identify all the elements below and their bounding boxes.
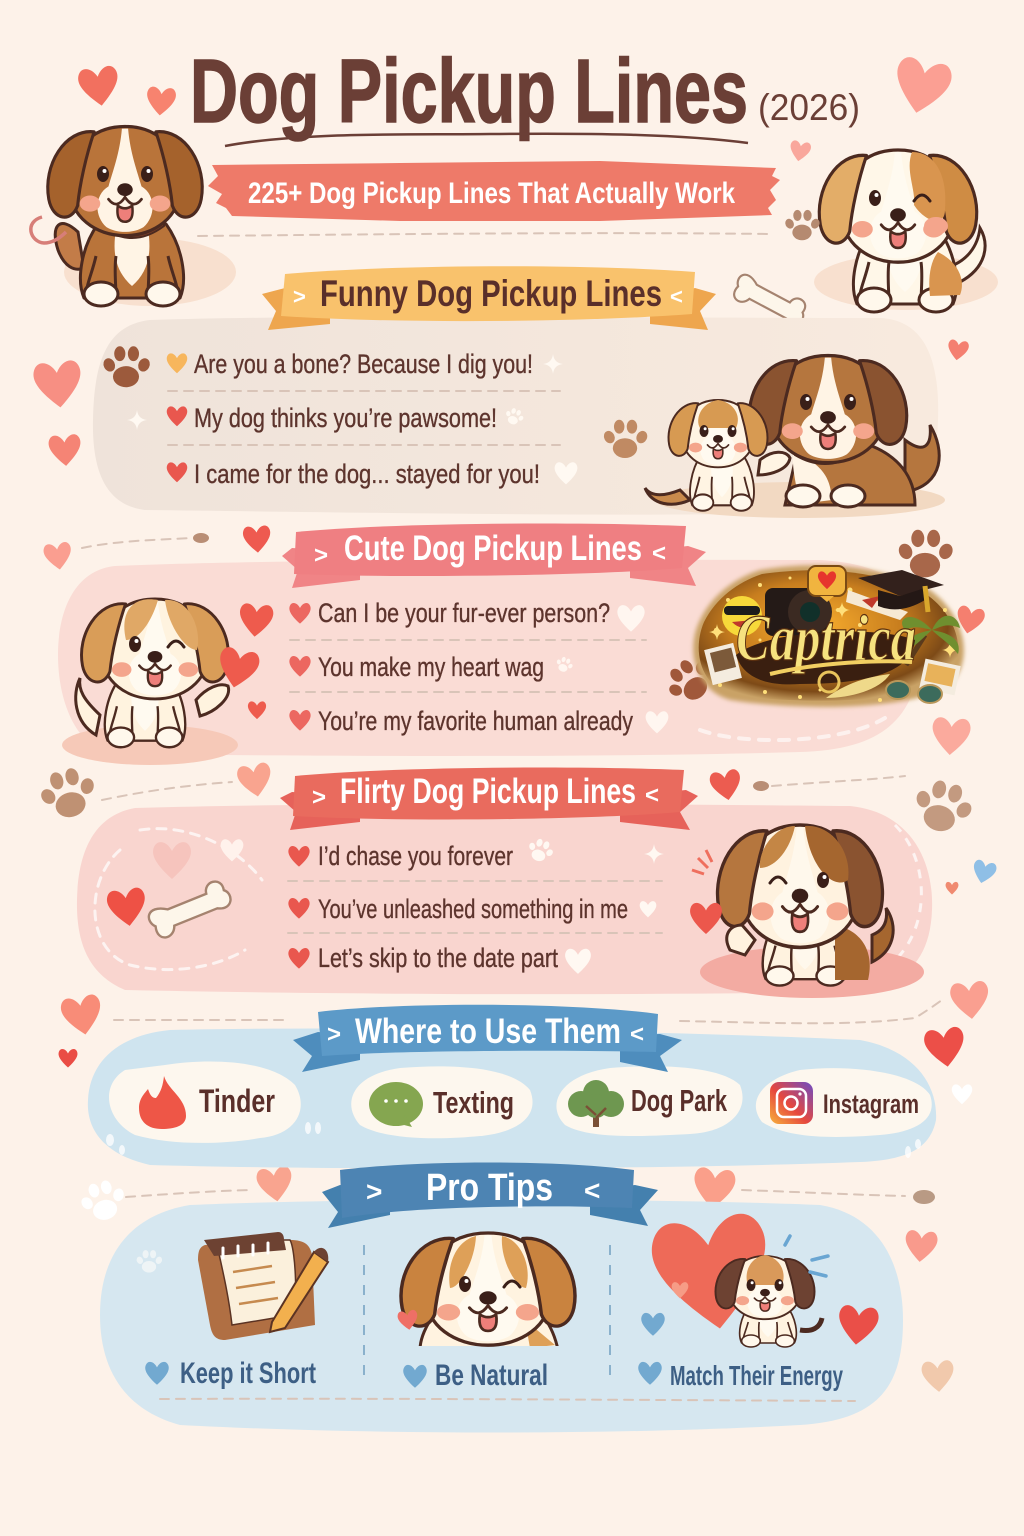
pro tips banner: < — [584, 1175, 600, 1206]
pill: instagram: Instagram — [823, 1089, 919, 1119]
subtitle banner — [208, 161, 780, 221]
panel: cute — [58, 560, 920, 756]
heart with puppy — [641, 1211, 880, 1347]
pill: dog park — [556, 1066, 743, 1136]
where banner: > — [327, 1021, 341, 1048]
tips labels: Match Their Energy — [670, 1360, 843, 1391]
puppy: cream top-right — [814, 150, 998, 312]
flirty banner — [280, 768, 698, 830]
swoosh and feather — [770, 661, 912, 698]
glitter — [705, 576, 958, 702]
decorative hearts top — [77, 55, 954, 163]
tips labels: Be Natural — [435, 1359, 548, 1392]
graduation cap — [858, 570, 944, 612]
big brown puppy — [749, 356, 939, 507]
title: Dog Pickup Lines — [190, 42, 748, 142]
panel: flirty — [77, 804, 932, 994]
heart and bone — [106, 878, 235, 941]
notepad icon — [198, 1232, 328, 1340]
pill: tinder — [109, 1062, 301, 1143]
palm — [902, 616, 960, 665]
where banner: Where to Use Them — [355, 1012, 621, 1051]
wordmark: Captrica — [736, 602, 916, 675]
cute lines — [289, 598, 646, 736]
puppy: pro tips natural — [397, 1233, 575, 1350]
icon: tree — [568, 1080, 624, 1127]
decor between panels — [34, 717, 998, 894]
heart behind logo — [954, 605, 986, 636]
cute banner: < — [652, 540, 666, 567]
funny lines: My dog thinks you’re pawsome! — [194, 403, 497, 433]
tips labels — [145, 1357, 843, 1392]
pill: texting: Texting — [433, 1085, 514, 1120]
pill: dog park: Dog Park — [631, 1083, 728, 1118]
flirty lines: Let’s skip to the date part — [318, 943, 558, 973]
tips labels: Keep it Short — [180, 1357, 316, 1390]
panel: funny — [93, 317, 938, 515]
flirty lines — [288, 841, 662, 973]
heart bubble — [808, 566, 846, 602]
icon: flame — [139, 1076, 186, 1129]
funny lines: Are you a bone? Because I dig you! — [194, 349, 533, 379]
funny banner — [262, 266, 716, 330]
panel paw — [101, 346, 152, 387]
pill: instagram — [756, 1068, 932, 1137]
panel: where to use — [88, 1028, 936, 1168]
panel: pro tips — [100, 1200, 903, 1433]
cute banner: Cute Dog Pickup Lines — [344, 529, 642, 568]
paw behind logo — [658, 650, 721, 712]
puppy: brown top-left — [31, 126, 236, 306]
pro tips banner: > — [366, 1176, 382, 1207]
cute lines: You make my heart wag — [318, 652, 544, 682]
flirty banner: Flirty Dog Pickup Lines — [340, 772, 636, 811]
puppy: cute with heart — [62, 599, 274, 765]
funny banner: Funny Dog Pickup Lines — [320, 273, 662, 314]
pill: texting — [351, 1066, 533, 1138]
star and leaf decor — [135, 1250, 163, 1273]
flirty lines: I’d chase you forever — [318, 841, 513, 871]
puppy: flirty — [690, 825, 924, 998]
funny lines: I came for the dog... stayed for you! — [194, 459, 540, 489]
decor lower — [59, 980, 991, 1393]
pill: tinder: Tinder — [199, 1083, 275, 1119]
where banner: < — [630, 1021, 644, 1048]
camera — [765, 588, 832, 636]
where banner — [293, 1005, 682, 1072]
cute lines: Can I be your fur-ever person? — [318, 598, 610, 628]
subtitle banner: 225+ Dog Pickup Lines That Actually Work — [248, 177, 735, 210]
pro tips banner — [322, 1162, 658, 1228]
cute banner: > — [314, 542, 328, 569]
icon: chat bubble — [369, 1082, 423, 1127]
flirty banner: < — [645, 782, 659, 809]
icon: instagram — [770, 1082, 813, 1124]
Captrica logo — [693, 565, 964, 707]
funny lines — [167, 349, 560, 489]
pro tips banner: Pro Tips — [426, 1167, 553, 1209]
flirty banner: > — [312, 784, 326, 811]
diploma — [846, 590, 908, 620]
funny banner: < — [670, 284, 683, 309]
decor left hearts mid — [32, 339, 969, 577]
logo dark ribbon — [736, 631, 915, 684]
cute lines: You’re my favorite human already — [318, 706, 633, 736]
cute banner — [282, 524, 706, 588]
small puppy — [645, 400, 790, 511]
paw and bone decorations — [729, 210, 821, 332]
flirty lines: You’ve unleashed something in me — [318, 894, 628, 924]
title: (2026) — [758, 87, 860, 128]
emoji — [722, 596, 762, 636]
photos — [704, 643, 961, 695]
panel 4 white accents — [106, 1122, 921, 1158]
held heart — [215, 646, 261, 691]
funny banner: > — [293, 284, 306, 309]
sunglasses — [886, 681, 942, 703]
puppies pair — [645, 356, 945, 518]
